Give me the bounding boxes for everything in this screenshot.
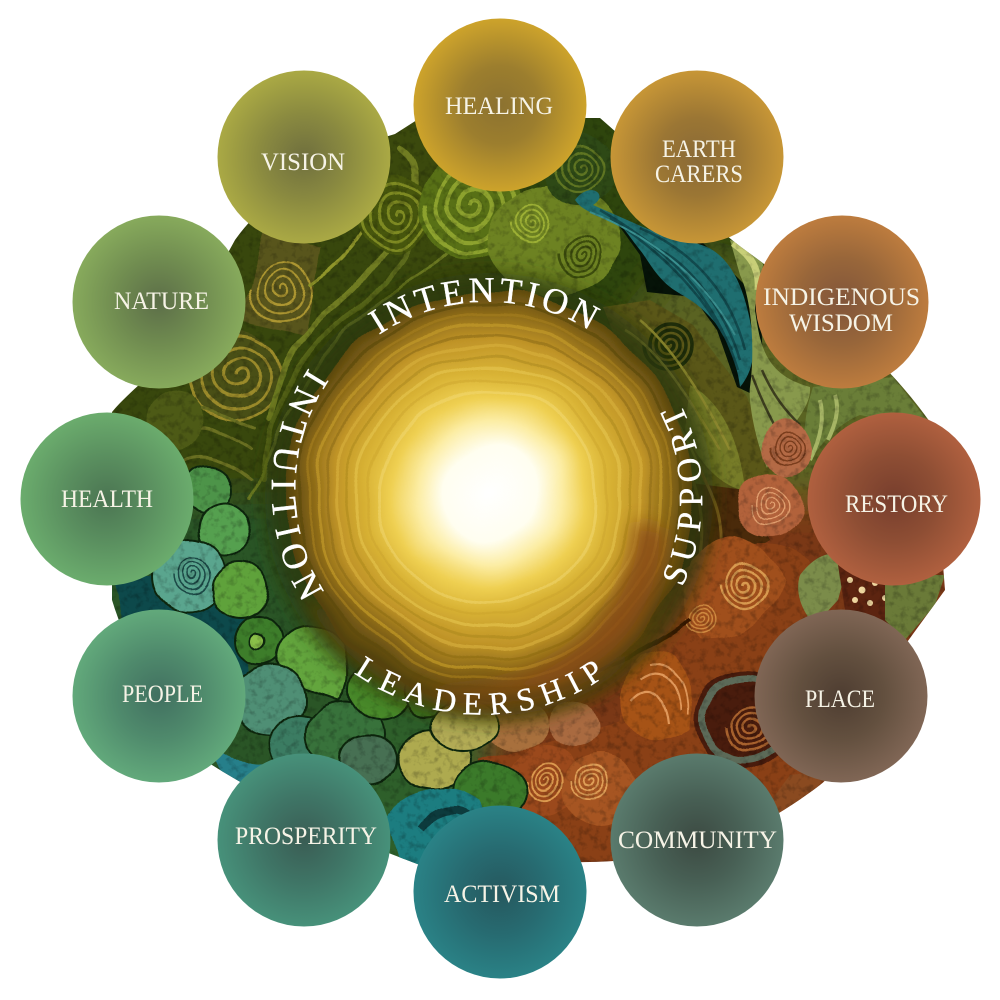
node: People bbox=[72, 610, 246, 782]
organic swirl background bbox=[112, 118, 945, 864]
bottom-left green bumps bbox=[112, 466, 526, 818]
node: Activism bbox=[414, 806, 586, 978]
node: Restory bbox=[808, 412, 980, 586]
node: Earth Carers: EARTH bbox=[662, 136, 736, 163]
node: Activism: ACTIVISM bbox=[444, 881, 560, 908]
central sun with rippled rings bbox=[265, 273, 713, 721]
node: Earth Carers: CARERS bbox=[655, 161, 743, 188]
curved word: INTENTION: INTENTION bbox=[367, 278, 601, 334]
far-right green and dotted forms bbox=[773, 554, 944, 813]
olive flows right of the sun bbox=[603, 300, 775, 590]
node: Healing bbox=[414, 18, 586, 192]
terracotta swirl forms bbox=[480, 420, 830, 860]
node: Vision bbox=[218, 70, 390, 244]
node: Prosperity: PROSPERITY bbox=[235, 823, 377, 850]
node: Health bbox=[20, 412, 194, 586]
node: Place bbox=[754, 610, 928, 782]
curved word: LEADERSHIP: LEADERSHIP bbox=[354, 656, 599, 715]
node: Vision: VISION bbox=[261, 149, 345, 176]
node: Nature: NATURE bbox=[114, 288, 209, 315]
node: Restory: RESTORY bbox=[845, 491, 948, 518]
node: Indigenous Wisdom: WISDOM bbox=[789, 310, 893, 337]
node: Community: COMMUNITY bbox=[618, 827, 777, 854]
node: Indigenous Wisdom bbox=[756, 216, 928, 388]
node: Health: HEALTH bbox=[61, 486, 153, 513]
node: Community bbox=[610, 754, 784, 926]
node: Indigenous Wisdom: INDIGENOUS bbox=[763, 284, 920, 311]
node: People: PEOPLE bbox=[122, 681, 203, 708]
teal stream with shadow bbox=[575, 190, 765, 400]
top-left olive flowing lines bbox=[145, 140, 450, 500]
right green leaves bbox=[730, 240, 935, 470]
node: Nature bbox=[72, 216, 246, 388]
curved word: INTUITION: INTUITION bbox=[272, 368, 328, 600]
top green rounded forms bbox=[418, 134, 623, 295]
curved word: SUPPORT: SUPPORT bbox=[660, 408, 702, 585]
node: Earth Carers bbox=[610, 70, 784, 244]
warm brown shading, lower right of sun bbox=[420, 520, 665, 699]
node: Healing: HEALING bbox=[445, 93, 553, 120]
texture grain bbox=[100, 110, 960, 880]
node: Prosperity bbox=[218, 754, 390, 926]
node: Place: PLACE bbox=[805, 686, 875, 713]
colour sectors bbox=[112, 118, 945, 864]
teal waves at bottom bbox=[216, 754, 482, 864]
